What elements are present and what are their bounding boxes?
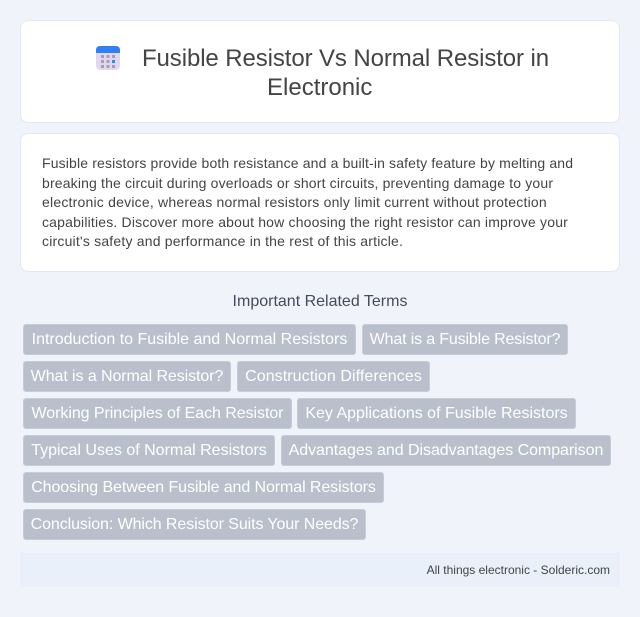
- header panel: [20, 20, 620, 123]
- tag: Conclusion: Which Resistor Suits Your Needs?: [31, 516, 358, 533]
- tag: [297, 398, 576, 429]
- description text: [42, 155, 573, 249]
- tag: Advantages and Disadvantages Comparison: [289, 442, 603, 459]
- tag: Working Principles of Each Resistor: [32, 405, 283, 422]
- section heading: Important Related Terms: [233, 293, 407, 310]
- tag: [23, 472, 384, 503]
- tag: Construction Differences: [245, 368, 422, 385]
- tag: Key Applications of Fusible Resistors: [305, 405, 568, 422]
- tag: What is a Normal Resistor?: [31, 368, 223, 385]
- icon: calendar: [96, 46, 120, 70]
- description text: circuit's safety and performance in the rest of this article.: [42, 233, 403, 249]
- tag: [23, 509, 366, 540]
- footer text: All things electronic - Solderic.com: [427, 563, 610, 577]
- description text: Fusible resistors provide both resistance and a built-in safety feature by melting and: [42, 155, 573, 171]
- tag: [281, 435, 611, 466]
- related terms tags: [23, 324, 611, 540]
- title: Electronic: [267, 74, 372, 101]
- title: [142, 45, 549, 101]
- description text: breaking the circuit during overloads or short circuits, preventing damage to your: [42, 175, 553, 191]
- tag: [237, 361, 430, 392]
- tag: [23, 435, 275, 466]
- footer bar: [20, 553, 620, 587]
- description panel: [20, 133, 620, 272]
- tag: Typical Uses of Normal Resistors: [31, 442, 267, 459]
- tag: Introduction to Fusible and Normal Resistors: [32, 331, 347, 348]
- description text: electronic device, whereas normal resistors only limit current without protection: [42, 194, 547, 210]
- title: Fusible Resistor Vs Normal Resistor in: [142, 45, 549, 72]
- tag: Choosing Between Fusible and Normal Resistors: [31, 479, 376, 496]
- tag: [23, 324, 356, 355]
- description text: capabilities. Discover more about how choosing the right resistor can improve your: [42, 214, 568, 230]
- tag: What is a Fusible Resistor?: [370, 331, 560, 348]
- tag: [23, 398, 292, 429]
- tag: [23, 361, 231, 392]
- tag: [362, 324, 568, 355]
